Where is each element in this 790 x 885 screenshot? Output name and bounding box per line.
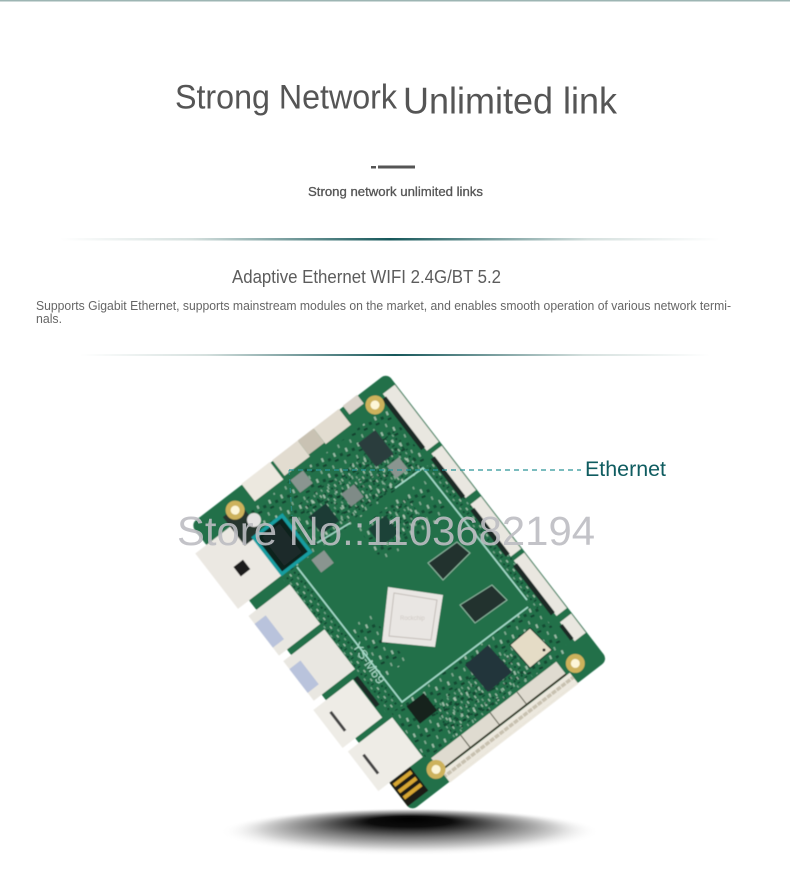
ethernet PHY chip highlighted: [254, 516, 310, 574]
circuit board photo: [177, 372, 608, 822]
title: Strong Network: [175, 78, 398, 116]
divider: [80, 354, 710, 356]
top edge line: [0, 0, 790, 2]
subtitle: Strong network unlimited links: [308, 184, 483, 199]
eMMC chip: [465, 645, 512, 692]
component texture: [238, 402, 577, 761]
section description: Supports Gigabit Ethernet, supports mainstream modules on the market, and enables smooth operation of various network termi-: [36, 299, 731, 313]
electrolytic capacitor: [247, 513, 261, 527]
title: [175, 78, 617, 122]
USB ports: [248, 584, 355, 701]
ethernet port: [188, 504, 290, 609]
mounting holes: [225, 393, 585, 781]
Ethernet callout: [289, 458, 666, 516]
HDMI ports: [313, 675, 423, 792]
divider: [60, 238, 720, 240]
title: Unlimited link: [403, 80, 617, 122]
pin header rows: [431, 659, 578, 783]
callout label: Ethernet: [585, 458, 666, 481]
core module outline: [297, 468, 528, 702]
SoC heat spreader: Rockchip: [400, 616, 425, 622]
title dash mark: [371, 166, 415, 168]
SoC heat spreader: [382, 587, 443, 647]
small power and logic parts: [254, 419, 536, 724]
section description: [36, 299, 731, 326]
board model label: YS-M69: [350, 639, 388, 687]
board shadow: [220, 808, 600, 856]
callout leader line: [289, 470, 581, 516]
top-left wire connectors: [241, 395, 370, 501]
PCB: [191, 373, 608, 811]
FPC connectors: [380, 385, 586, 644]
store watermark: Store No.:1103682194: [177, 508, 595, 554]
board body and edge connectors: [177, 372, 608, 822]
section description: nals.: [36, 312, 62, 326]
gold audio jack: [389, 767, 428, 806]
WiFi module: [510, 628, 552, 668]
RAM chips: [428, 542, 507, 623]
section heading: Adaptive Ethernet WIFI 2.4G/BT 5.2: [232, 267, 501, 287]
